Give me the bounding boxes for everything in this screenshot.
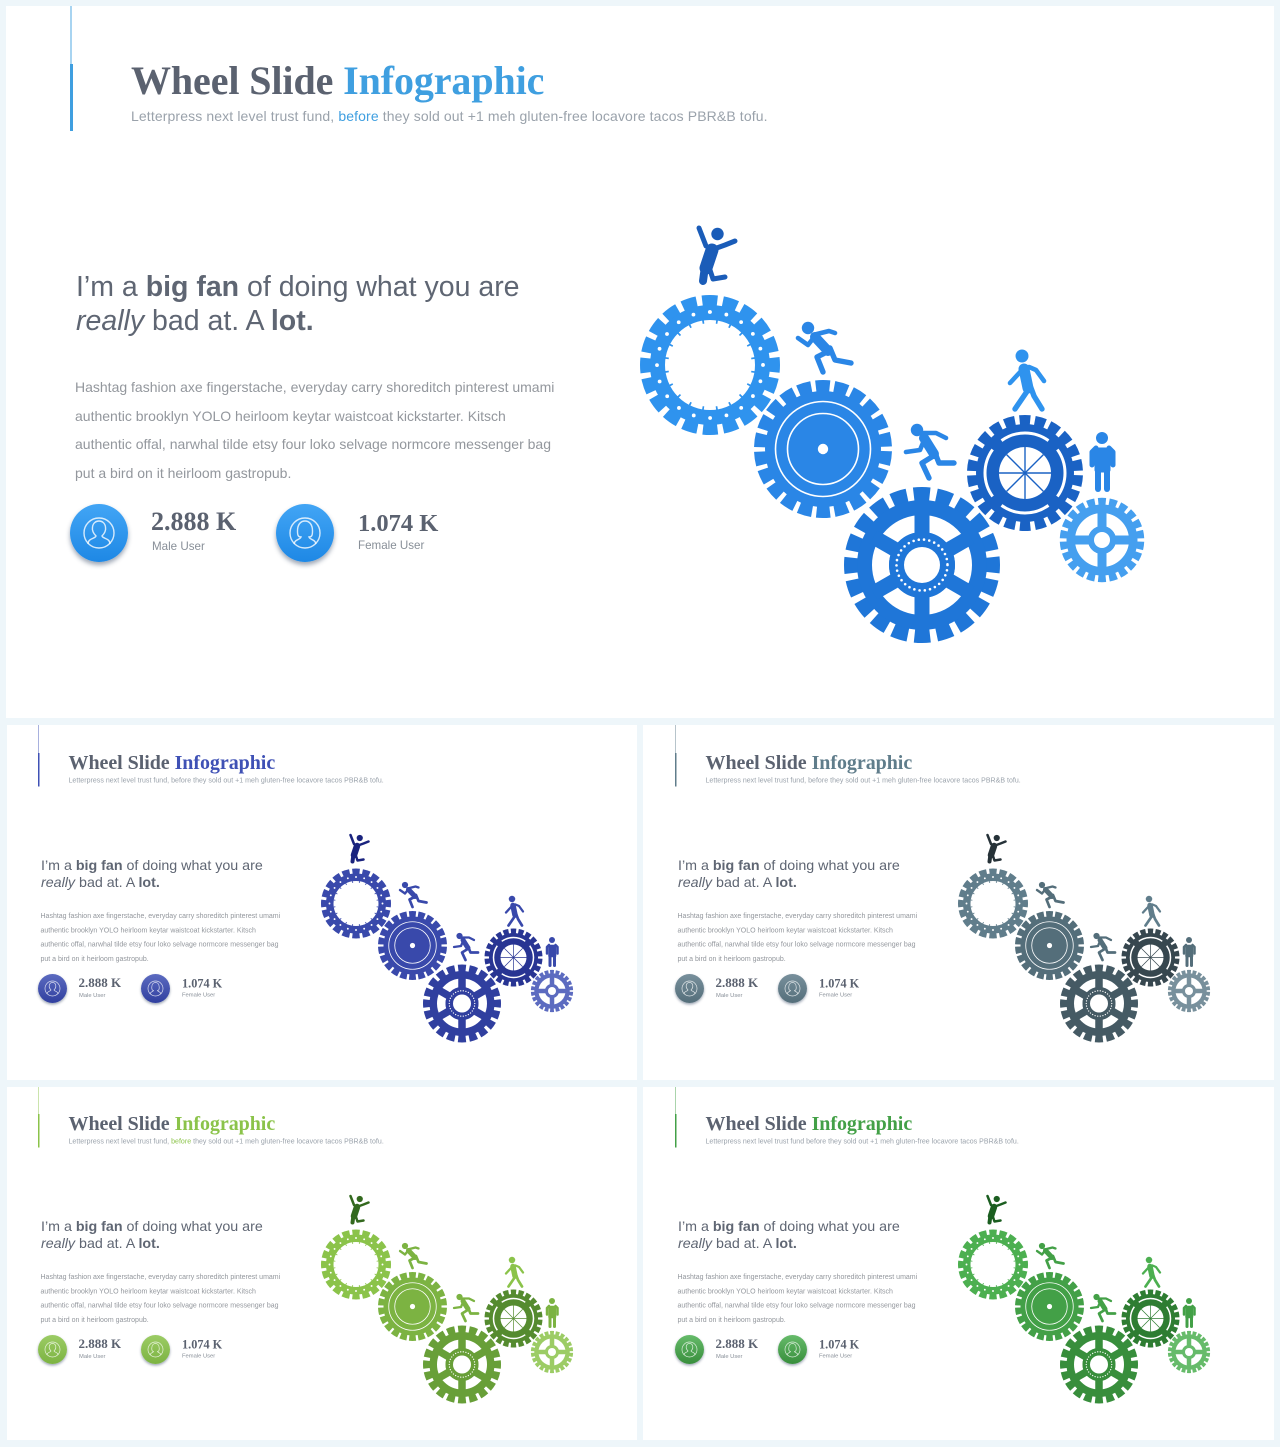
stat icon: female user — [141, 974, 170, 1002]
title: Wheel Slide Infographic — [68, 750, 275, 773]
stat: male user label: Male User — [152, 540, 205, 553]
panel: indigo slide — [7, 725, 637, 1080]
heading: really bad at. A lot. — [678, 874, 797, 890]
icon: standing person — [1092, 432, 1113, 489]
title: Wheel Slide Infographic — [131, 58, 544, 103]
body paragraph: Hashtag fashion axe fingerstache, everyday carry shoreditch pinterest umami — [678, 911, 917, 919]
body paragraph: authentic offal, narwhal tilde etsy four loko selvage normcore messenger bag — [678, 1301, 916, 1309]
panel: green slide — [643, 1087, 1274, 1440]
header accent bar — [38, 1082, 39, 1114]
stat: male user label: Male User — [716, 992, 742, 998]
stat icon: male user — [38, 1334, 67, 1364]
gear illustration — [640, 226, 1144, 643]
body paragraph: authentic brooklyn YOLO heirloom keytar waistcoat kickstarter. Kitsch — [75, 408, 506, 424]
gear illustration — [321, 1194, 574, 1404]
body paragraph: put a bird on it heirloom gastropub. — [678, 1315, 786, 1323]
body paragraph: authentic brooklyn YOLO heirloom keytar waistcoat kickstarter. Kitsch — [678, 1286, 893, 1294]
stat: female user value: 1.074 K — [819, 1338, 859, 1351]
title: Wheel Slide Infographic — [706, 1112, 912, 1134]
heading: really bad at. A lot. — [76, 304, 314, 336]
body paragraph: authentic brooklyn YOLO heirloom keytar waistcoat kickstarter. Kitsch — [678, 925, 893, 933]
stat: male user value: 2.888 K — [716, 1336, 758, 1350]
gear 1: ring — [646, 300, 774, 430]
body paragraph: authentic offal, narwhal tilde etsy four loko selvage normcore messenger bag — [75, 436, 551, 452]
stat: male user label: Male User — [79, 1352, 105, 1359]
body paragraph — [40, 1272, 280, 1324]
stat icon: female user — [778, 1334, 807, 1364]
stat: female user label: Female User — [819, 1352, 852, 1358]
gear 4: wheel — [972, 420, 1078, 526]
body paragraph: authentic offal, narwhal tilde etsy four loko selvage normcore messenger bag — [40, 1301, 279, 1309]
title: Wheel Slide Infographic — [68, 1112, 275, 1134]
body paragraph: authentic brooklyn YOLO heirloom keytar waistcoat kickstarter. Kitsch — [40, 1286, 256, 1294]
gear 3: spoked — [852, 494, 992, 636]
gear illustration — [321, 834, 574, 1042]
stat: female user label: Female User — [819, 991, 852, 998]
gear illustration — [958, 834, 1210, 1042]
body paragraph: Hashtag fashion axe fingerstache, everyday carry shoreditch pinterest umami — [40, 911, 280, 919]
text column — [674, 1112, 1160, 1400]
icon: running person 2 — [906, 424, 954, 478]
body paragraph: Hashtag fashion axe fingerstache, everyday carry shoreditch pinterest umami — [75, 379, 554, 395]
heading: really bad at. A lot. — [41, 1235, 160, 1251]
text column — [36, 1112, 523, 1400]
subtitle: Letterpress next level trust fund, before they sold out +1 meh gluten-free locavore tacos PBR&B tofu. — [706, 776, 1021, 784]
text column — [36, 750, 524, 1040]
header accent bar — [70, 0, 72, 64]
gear illustration — [958, 1194, 1210, 1404]
body paragraph — [40, 911, 280, 962]
stat: female user label: Female User — [182, 1352, 215, 1358]
stat icon: female user — [141, 1334, 170, 1364]
heading: I’m a big fan of doing what you are — [678, 1218, 900, 1234]
subtitle: Letterpress next level trust fund, before they sold out +1 meh gluten-free locavore tacos PBR&B tofu. — [68, 1136, 384, 1144]
icon: running person — [798, 322, 851, 372]
gear 2: disc — [760, 386, 886, 512]
icon: walking person — [1010, 350, 1044, 409]
body paragraph — [75, 379, 554, 481]
heading: I’m a big fan of doing what you are — [41, 857, 263, 873]
heading — [41, 1218, 263, 1251]
body paragraph — [678, 1272, 917, 1324]
body paragraph: put a bird on it heirloom gastropub. — [678, 954, 786, 962]
body paragraph: put a bird on it heirloom gastropub. — [40, 1315, 149, 1323]
gear 5: small — [1064, 502, 1140, 578]
stat: female user label: Female User — [182, 991, 215, 998]
heading: really bad at. A lot. — [41, 874, 160, 890]
stat: female user value: 1.074 K — [819, 976, 859, 990]
stat icon: male user — [675, 974, 704, 1002]
heading — [41, 857, 263, 890]
heading: I’m a big fan of doing what you are — [678, 857, 900, 873]
body paragraph: authentic offal, narwhal tilde etsy four loko selvage normcore messenger bag — [40, 940, 279, 948]
body paragraph: authentic brooklyn YOLO heirloom keytar waistcoat kickstarter. Kitsch — [40, 925, 256, 933]
stat: male user value: 2.888 K — [716, 975, 758, 990]
stat: female user value: 1.074 K — [182, 1338, 222, 1351]
body paragraph — [678, 911, 917, 962]
stat icon: male user — [38, 974, 67, 1002]
stat icon: female user — [778, 974, 807, 1002]
body paragraph: authentic offal, narwhal tilde etsy four loko selvage normcore messenger bag — [678, 940, 916, 948]
subtitle: Letterpress next level trust fund before they sold out +1 meh gluten-free locavore tacos PBR&B tofu. — [706, 1136, 1019, 1144]
stat: male user value: 2.888 K — [78, 1336, 121, 1350]
body paragraph: Hashtag fashion axe fingerstache, everyday carry shoreditch pinterest umami — [678, 1272, 917, 1280]
stat icon: male user — [70, 504, 128, 562]
body paragraph: put a bird on it heirloom gastropub. — [75, 465, 291, 481]
panel: slate slide — [643, 725, 1274, 1080]
stat: female user value: 1.074 K — [182, 976, 222, 990]
title: Wheel Slide Infographic — [706, 750, 912, 773]
subtitle: Letterpress next level trust fund, before they sold out +1 meh gluten-free locavore tacos PBR&B tofu. — [131, 108, 768, 124]
icon: jumping person — [699, 228, 735, 281]
stat icon: male user — [675, 1334, 704, 1364]
stat: male user label: Male User — [79, 992, 105, 998]
stat: male user label: Male User — [716, 1352, 742, 1359]
stat: male user value: 2.888 K — [78, 975, 121, 990]
heading — [678, 1218, 900, 1251]
subtitle: Letterpress next level trust fund, before they sold out +1 meh gluten-free locavore tacos PBR&B tofu. — [68, 776, 384, 784]
panel: light green slide — [7, 1087, 637, 1440]
heading — [76, 271, 520, 336]
header accent bar — [675, 720, 676, 752]
stat: female user label: Female User — [358, 539, 424, 552]
stat: male user value: 2.888 K — [151, 507, 236, 536]
panel: main slide (blue) — [6, 6, 1274, 718]
header accent bar — [675, 1082, 676, 1114]
body paragraph: Hashtag fashion axe fingerstache, everyday carry shoreditch pinterest umami — [40, 1272, 280, 1280]
header accent bar — [38, 720, 39, 752]
body paragraph: put a bird on it heirloom gastropub. — [40, 954, 149, 962]
heading: really bad at. A lot. — [678, 1235, 797, 1251]
heading: I’m a big fan of doing what you are — [41, 1218, 263, 1234]
text column — [674, 750, 1162, 1040]
stat icon: female user — [276, 504, 334, 562]
stat: female user value: 1.074 K — [358, 510, 438, 537]
heading — [678, 857, 900, 890]
heading: I’m a big fan of doing what you are — [76, 271, 520, 303]
